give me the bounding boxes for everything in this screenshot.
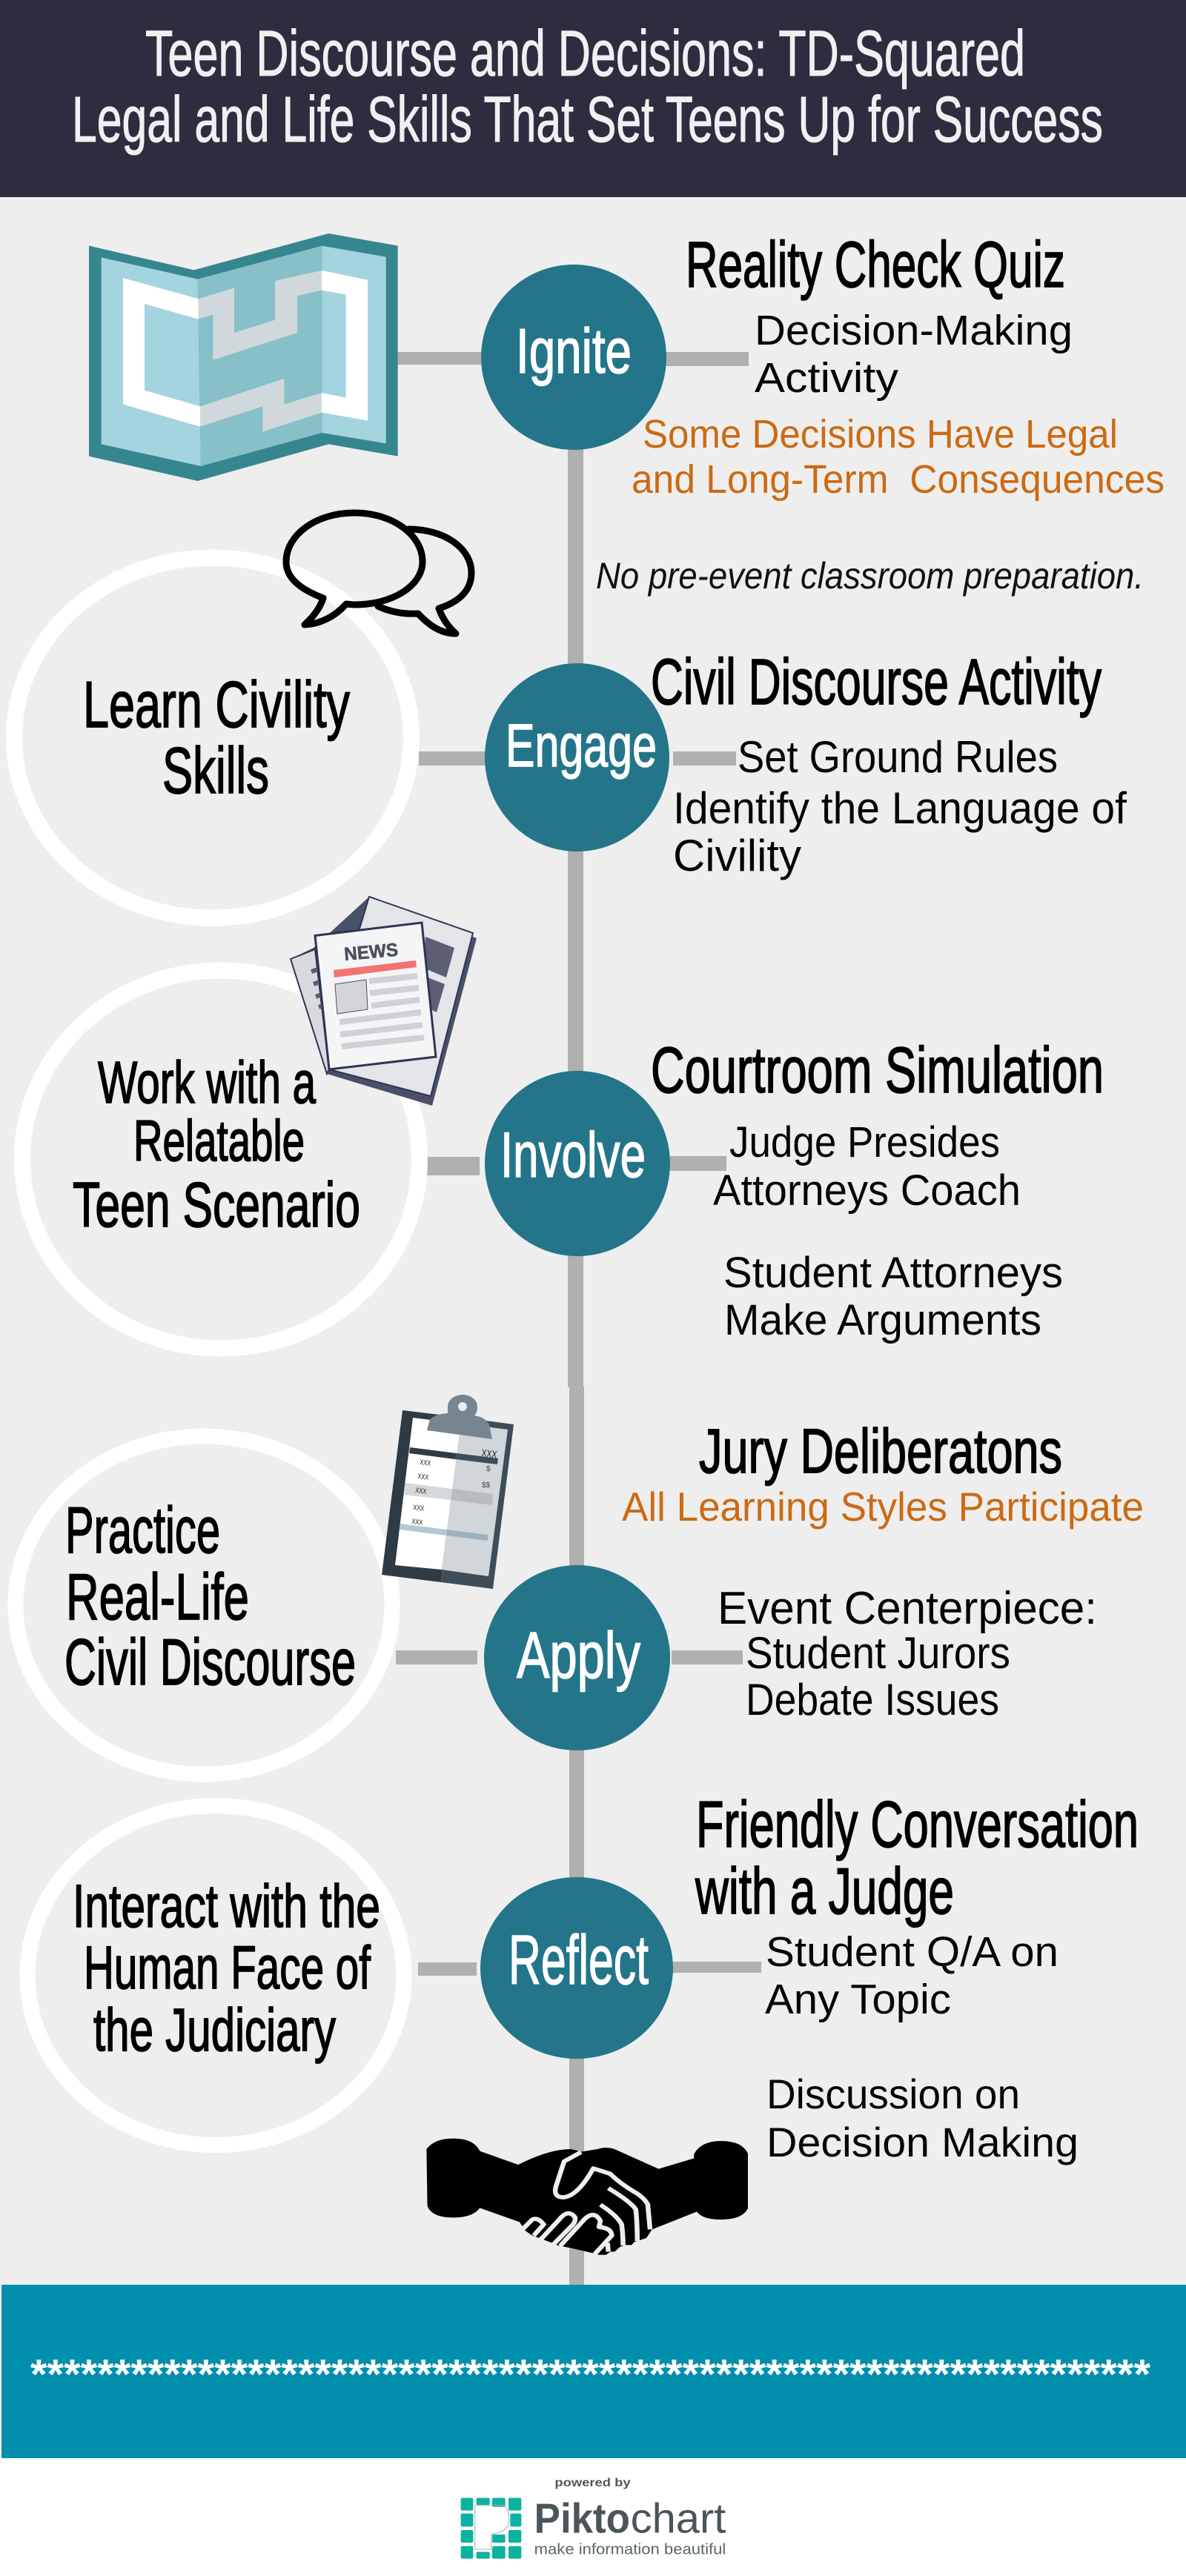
panel: Learn Civility Skills: Learn Civility (83, 668, 350, 741)
panel: Interact with the Human Face of the Judiciary (27, 1805, 404, 2145)
block: Courtroom Simulation: Student Attorneys (723, 1249, 1063, 1297)
icon: newspaper (291, 897, 477, 1106)
block: Courtroom Simulation (651, 1035, 1104, 1344)
node: Engage: Engage (506, 712, 657, 780)
block: Civil Discourse Activity: Civility (673, 831, 801, 880)
header banner (0, 0, 1186, 197)
block: Friendly Conversation with a Judge: Student Q/A on (766, 1928, 1059, 1976)
icon: clipboard: XXX (411, 1518, 423, 1527)
panel: Work with a Relatable Teen Scenario: Teen Scenario (73, 1170, 360, 1241)
icon: clipboard: XXX (420, 1458, 431, 1468)
block: Courtroom Simulation: Attorneys Coach (713, 1166, 1021, 1215)
node: Apply (484, 1565, 670, 1750)
block: Jury Deliberatons: Jury Deliberatons (699, 1416, 1062, 1486)
panel: Interact with the Human Face of the Judiciary: Interact with the (73, 1873, 380, 1940)
panel: Work with a Relatable Teen Scenario: Work with a (98, 1049, 316, 1115)
asterisk row: ******************************************************************* (30, 2351, 1151, 2398)
panel: Interact with the Human Face of the Judiciary: the Judiciary (93, 1996, 336, 2064)
block: Friendly Conversation with a Judge: Any Topic (765, 1976, 951, 2023)
block: Reality Check Quiz: Activity (755, 354, 899, 402)
logo: powered by Piktochart (461, 2477, 726, 2559)
node: Apply: Apply (517, 1619, 640, 1692)
icon: clipboard: XXX (413, 1504, 425, 1513)
panel: Practice Real-Life Civil Discourse: Civil Discourse (64, 1625, 356, 1699)
block: Jury Deliberatons: Event Centerpiece: (718, 1583, 1097, 1634)
panel: Practice Real-Life Civil Discourse: Real-Life (66, 1560, 249, 1633)
logo: powered by Piktochart: chart (631, 2496, 726, 2543)
block: Friendly Conversation with a Judge: Discussion on (766, 2071, 1020, 2117)
icon: newspaper: NEWS (343, 940, 399, 965)
panel: Learn Civility Skills (14, 557, 411, 917)
block: Civil Discourse Activity: Identify the Language of (673, 783, 1127, 833)
connectors (396, 352, 761, 1976)
icon: clipboard: $ (486, 1465, 491, 1473)
icon: handshake (426, 2139, 748, 2255)
block: Civil Discourse Activity (651, 646, 1127, 880)
footer band (1, 2285, 1186, 2458)
block: Friendly Conversation with a Judge: Decision Making (766, 2119, 1079, 2165)
block: Reality Check Quiz (632, 229, 1165, 502)
title (72, 18, 1103, 156)
node: Ignite (481, 265, 666, 450)
icon: clipboard: XXX (415, 1487, 427, 1496)
block: Reality Check Quiz: Some Decisions Have Legal (643, 412, 1118, 457)
panel: Practice Real-Life Civil Discourse: Practice (65, 1493, 220, 1567)
node: Reflect: Reflect (508, 1921, 649, 1999)
logo: powered by Piktochart: powered by (554, 2477, 631, 2489)
block: Courtroom Simulation: Make Arguments (724, 1296, 1041, 1344)
panel: Learn Civility Skills: Skills (162, 734, 269, 807)
timeline vertical line (568, 445, 584, 2285)
block: Jury Deliberatons: All Learning Styles Participate (622, 1484, 1144, 1530)
node: Involve: Involve (500, 1120, 646, 1191)
node: Involve (485, 1071, 670, 1256)
panel: Work with a Relatable Teen Scenario (22, 971, 420, 1349)
node: Ignite: Ignite (516, 316, 632, 387)
node: Engage (485, 663, 669, 852)
block: Friendly Conversation with a Judge (695, 1787, 1139, 2165)
icon: clipboard: $$ (482, 1481, 491, 1490)
block: Civil Discourse Activity: Set Ground Rules (738, 732, 1058, 782)
node: Reflect (480, 1877, 673, 2059)
icon: folded map (89, 233, 398, 481)
block: Jury Deliberatons: Student Jurors (746, 1628, 1010, 1678)
block: Jury Deliberatons: Debate Issues (746, 1675, 999, 1724)
icon: clipboard (382, 1395, 514, 1589)
panel: Work with a Relatable Teen Scenario: Relatable (133, 1108, 305, 1173)
block: Courtroom Simulation: Judge Presides (729, 1118, 1000, 1166)
logo: powered by Piktochart: Pikto (534, 2496, 630, 2543)
icon: speech bubbles (286, 513, 471, 634)
icon: clipboard: XXX (417, 1473, 429, 1482)
panel: Interact with the Human Face of the Judiciary: Human Face of (84, 1934, 371, 2002)
block: Reality Check Quiz: and Long-Term Consequences (632, 457, 1165, 502)
icon: clipboard: XXX (481, 1447, 498, 1461)
panel: Practice Real-Life Civil Discourse (16, 1436, 392, 1774)
block: Friendly Conversation with a Judge: with a Judge (695, 1854, 954, 1928)
note: no preparation: No pre-event classroom preparation. (596, 555, 1144, 597)
logo: powered by Piktochart: make information beautiful (534, 2541, 726, 2558)
block: Jury Deliberatons (622, 1416, 1144, 1724)
block: Reality Check Quiz: Decision-Making (755, 307, 1073, 354)
